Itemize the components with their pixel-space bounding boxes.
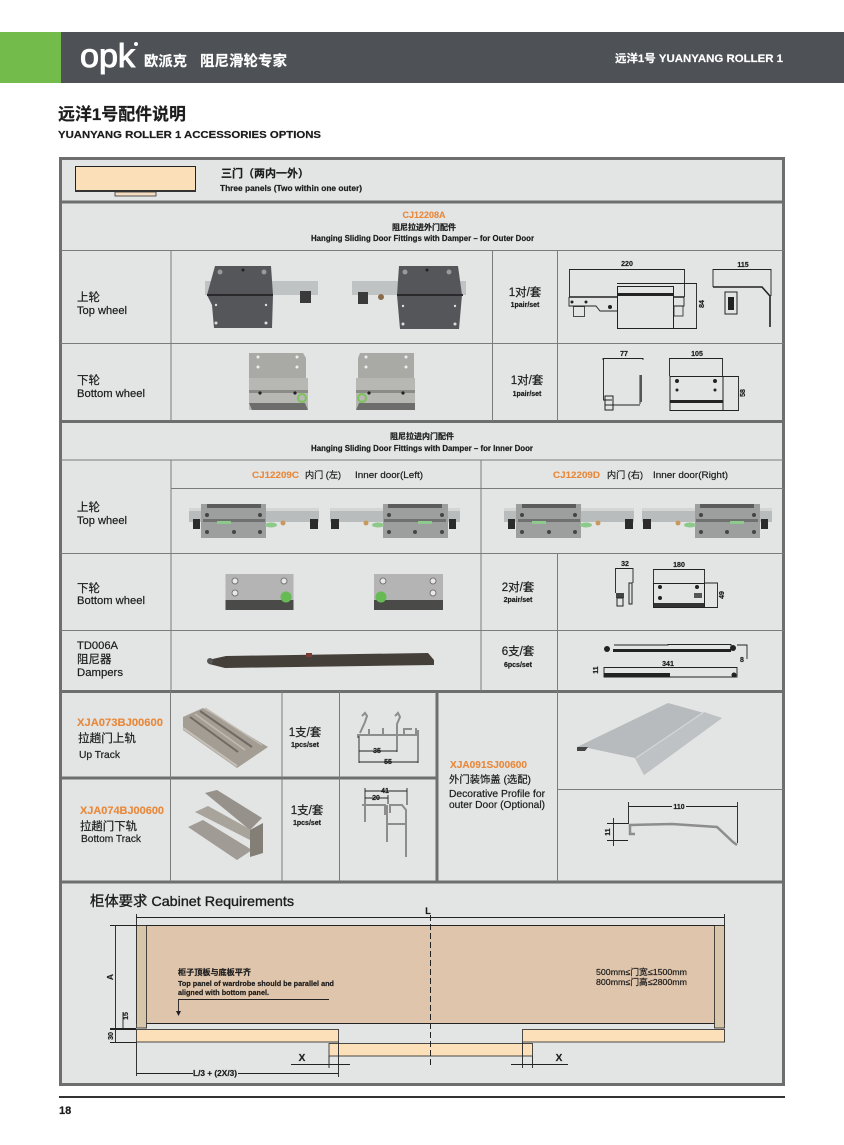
photo: inner bottom wheel left: [226, 574, 294, 610]
quantity: damper: 6pcs/set: [504, 662, 533, 669]
logo opk: opk: [80, 37, 136, 74]
drawing: outer bottom wheel: 77: [620, 351, 628, 358]
quantity: inner bottom wheel: 2对/套: [502, 580, 535, 594]
drawing: outer top wheel side: [713, 262, 771, 327]
photo: bottom track: [188, 790, 263, 860]
photo: outer bottom wheel left: [249, 353, 308, 410]
photo: decorative profile: [577, 703, 722, 775]
dimension labels: 15: [123, 1012, 130, 1020]
brand text: 欧派克: [144, 52, 187, 70]
quantity: top wheel: [509, 285, 542, 309]
photo: outer bottom wheel right: [356, 353, 415, 410]
header band: [0, 32, 844, 83]
subheading: CJ12209D inner right: CJ12209D: [553, 470, 600, 481]
label: top wheel: 上轮: [77, 290, 100, 304]
layout label chinese: 三门（两内一外）: [221, 166, 309, 180]
photo: damper: [207, 653, 434, 668]
note: top panel alignment: 柜子顶板与底板平齐: [178, 967, 251, 977]
quantity: up track: 1支/套: [289, 726, 322, 739]
drawing: outer bottom wheel: 58: [740, 389, 747, 397]
quantity: up track: 1pcs/set: [291, 742, 320, 749]
panel: up track text: XJA073BJ00600: [77, 717, 163, 729]
drawing: decorative section: 110: [673, 804, 685, 811]
panel: door layout header: [75, 166, 362, 196]
drawing: inner bottom wheel: [616, 561, 726, 608]
quantity: top wheel: 1对/套: [509, 285, 542, 299]
dimension lines: [110, 914, 724, 1077]
quantity: bottom wheel: [511, 373, 544, 398]
label: top wheel: [77, 290, 127, 317]
slogan: 阻尼滑轮专家: [200, 52, 288, 70]
dimension labels: L/3 + (2X/3): [193, 1068, 237, 1078]
cabinet heading: 柜体要求 Cabinet Requirements: [90, 893, 294, 909]
label: bottom wheel: Bottom wheel: [77, 388, 145, 400]
header right title: 远洋1号 YUANYANG ROLLER 1: [615, 51, 783, 65]
model code: CJ12208A: [402, 210, 446, 220]
heading english: Hanging Sliding Door Fittings with Damper – for Inner Door: [311, 444, 533, 453]
main table frame: [60, 158, 784, 1084]
page title english: YUANYANG ROLLER 1 ACCESSORIES OPTIONS: [58, 129, 321, 141]
quantity: bottom track: 1支/套: [291, 804, 324, 817]
note: top panel alignment: [176, 967, 334, 1016]
quantity: bottom wheel: 1对/套: [511, 373, 544, 387]
page title chinese: 远洋1号配件说明: [58, 104, 186, 124]
label: bottom wheel: 下轮: [77, 373, 100, 387]
panel: outer door heading: [311, 210, 534, 243]
subheading: CJ12209D inner right: [553, 469, 728, 481]
quantity: inner bottom wheel: 2pair/set: [504, 597, 533, 604]
quantity: bottom track: 1pcs/set: [293, 820, 322, 827]
drawing: damper: [593, 644, 747, 678]
photo: up track: [183, 708, 268, 768]
note: door size limits: 500mm≤门宽≤1500mm: [596, 967, 687, 977]
quantity: top wheel: 1pair/set: [511, 302, 540, 309]
panel: decorative profile text: outer Door (Optional): [449, 799, 545, 811]
layout label english: Three panels (Two within one outer): [220, 184, 362, 193]
quantity: damper: [502, 645, 535, 669]
drawing: up track profile: 35: [373, 748, 381, 755]
note: door size limits: [596, 967, 687, 987]
panel: decorative profile text: XJA091SJ00600: [450, 759, 527, 771]
drawing: inner bottom wheel: 49: [719, 591, 726, 599]
drawing: damper: 341: [662, 661, 674, 668]
subheading: CJ12209C inner left: Inner door(Left): [355, 470, 423, 481]
label: damper: 阻尼器: [77, 653, 112, 666]
panel: decorative profile text: [449, 759, 545, 811]
green corner block: [0, 32, 61, 83]
drawing: bottom track profile: 41: [381, 788, 389, 795]
panel: up track text: [77, 717, 163, 761]
label: inner bottom wheel: 下轮: [77, 581, 100, 595]
quantity: up track: [289, 726, 322, 749]
label: damper: TD006A: [77, 640, 119, 652]
drawing: inner bottom wheel: 32: [621, 561, 629, 568]
panel: up track text: 拉趟门上轨: [78, 731, 137, 745]
photos: inner top wheels right door: [504, 504, 772, 538]
quantity: inner bottom wheel: [502, 580, 535, 604]
label: inner top wheel: Top wheel: [77, 515, 127, 527]
dimension labels: A: [105, 974, 115, 980]
panel: bottom track text: XJA074BJ00600: [80, 805, 164, 817]
footer rule: [59, 1096, 785, 1098]
dimension labels: X: [556, 1053, 563, 1064]
drawing: up track profile: 55: [384, 759, 392, 766]
drawing: outer top wheel front: [569, 261, 706, 328]
dimension labels: [105, 906, 563, 1079]
page number: 18: [59, 1105, 71, 1117]
drawing: up track profile: [358, 713, 418, 766]
photo: outer top wheel left: [205, 266, 318, 328]
label: damper: [77, 640, 124, 679]
label: inner top wheel: 上轮: [77, 500, 100, 514]
drawing: outer top wheel front: 220: [621, 261, 633, 268]
label: inner bottom wheel: Bottom wheel: [77, 595, 145, 607]
subheading: CJ12209D inner right: 内门 (右): [607, 469, 643, 480]
quantity: bottom wheel: 1pair/set: [513, 391, 542, 398]
photos: inner top wheels left door: [189, 504, 460, 538]
panel: up track text: Up Track: [79, 750, 121, 761]
drawing: decorative section: 11: [605, 828, 612, 836]
panel: inner door heading: [311, 431, 533, 453]
label: inner bottom wheel: [77, 581, 145, 607]
drawing: inner bottom wheel: 180: [673, 562, 685, 569]
panel: bottom track text: [80, 805, 164, 845]
subheading: CJ12209D inner right: Inner door(Right): [653, 470, 728, 481]
photo: outer top wheel right: [352, 266, 466, 329]
subheading: CJ12209C inner left: CJ12209C: [252, 470, 299, 481]
panel: decorative profile text: 外门装饰盖 (选配): [449, 773, 531, 786]
note: top panel alignment: aligned with bottom panel.: [178, 988, 269, 997]
drawing: decorative section: [605, 801, 738, 846]
outer door panels: [136, 1030, 724, 1042]
drawing: outer bottom wheel: 105: [691, 351, 703, 358]
photo: inner bottom wheel right: [374, 574, 443, 610]
heading english: Hanging Sliding Door Fittings with Damper – for Outer Door: [311, 234, 534, 243]
icon: three panel swatch: [75, 166, 196, 196]
dimension labels: 30: [108, 1032, 115, 1040]
drawing: damper: 11: [593, 666, 600, 674]
quantity: bottom track: [291, 804, 324, 827]
panel: cabinet requirements: [90, 893, 724, 1079]
inner door panel: [329, 1044, 532, 1056]
quantity: damper: 6支/套: [502, 645, 535, 658]
subheading: CJ12209C inner left: [252, 469, 423, 481]
label: damper: Dampers: [77, 667, 124, 679]
panel: decorative profile text: Decorative Profile for: [449, 788, 545, 800]
note: top panel alignment: Top panel of wardrobe should be parallel and: [178, 979, 334, 988]
drawing: outer top wheel front: 84: [699, 300, 706, 308]
label: inner top wheel: [77, 500, 127, 527]
label: bottom wheel: [77, 373, 145, 400]
heading chinese: 阻尼拉进内门配件: [390, 431, 454, 441]
panel: bottom track text: Bottom Track: [81, 834, 142, 845]
drawing: bottom track profile: 20: [372, 795, 380, 802]
panel: bottom track text: 拉趟门下轨: [80, 819, 137, 833]
heading chinese: 阻尼拉进外门配件: [392, 222, 456, 232]
subheading: CJ12209C inner left: 内门 (左): [305, 469, 341, 480]
label: top wheel: Top wheel: [77, 305, 127, 317]
drawing: cabinet body: [136, 926, 724, 1028]
dimension labels: X: [299, 1053, 306, 1064]
drawing: bottom track profile: [362, 788, 407, 857]
note: door size limits: 800mm≤门高≤2800mm: [596, 977, 687, 987]
drawing: outer bottom wheel: [603, 351, 747, 410]
drawing: damper: 8: [740, 657, 744, 664]
drawing: outer top wheel side: 115: [737, 262, 749, 269]
dimension labels: L: [425, 906, 431, 916]
